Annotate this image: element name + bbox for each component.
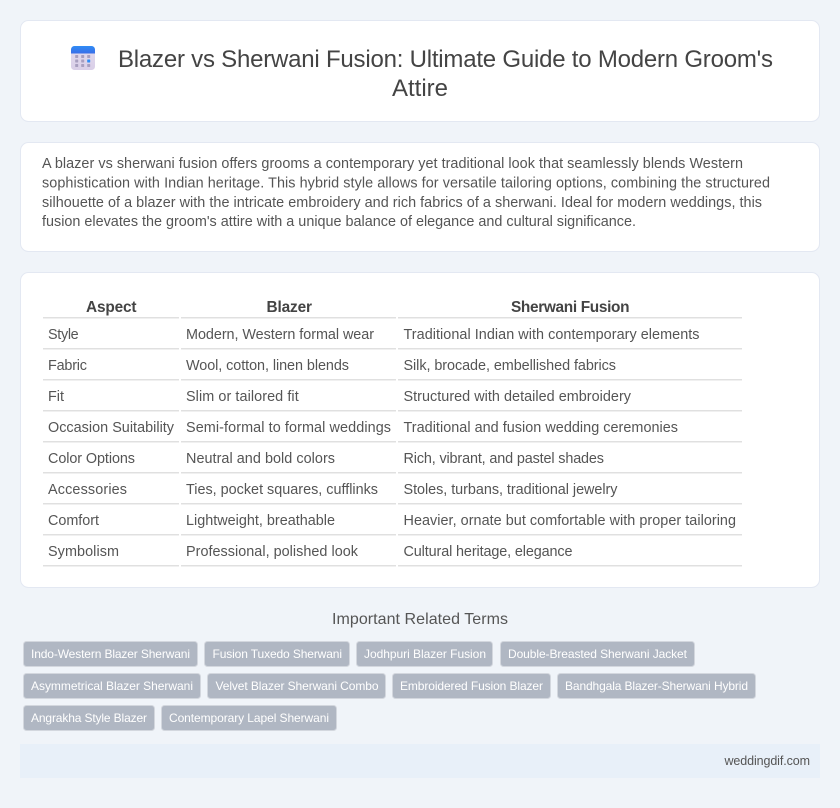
chip: Double-Breasted Sherwani Jacket xyxy=(508,647,688,661)
chip: Angrakha Style Blazer xyxy=(31,711,147,725)
row: color options xyxy=(48,451,604,467)
text block: introduction: fusion elevates the groom's attire with a unique balance of elegance and cultural significance. xyxy=(42,214,636,230)
chip xyxy=(24,642,198,666)
row: color options: Rich, vibrant, and pastel shades xyxy=(404,451,604,467)
chip: Contemporary Lapel Sherwani xyxy=(169,711,329,725)
panel: description xyxy=(20,142,820,252)
row: fabric: Wool, cotton, linen blends xyxy=(186,358,349,374)
row: style: Traditional Indian with contemporary elements xyxy=(404,327,700,343)
row: symbolism xyxy=(48,544,572,560)
heading: important related terms: Important Related Terms xyxy=(332,611,508,628)
text block: introduction xyxy=(42,156,770,230)
row: fabric: Silk, brocade, embellished fabrics xyxy=(404,358,616,374)
text block: introduction: sophistication with Indian heritage. This hybrid style allows for versatile tailoring options, combining the structured xyxy=(42,176,770,192)
row: symbolism: Professional, polished look xyxy=(186,544,359,560)
row: accessories xyxy=(48,482,618,498)
row: accessories: Stoles, turbans, traditional jewelry xyxy=(404,482,618,498)
row: occasion suitability: Traditional and fusion wedding ceremonies xyxy=(404,420,678,436)
chip xyxy=(558,674,756,698)
chip xyxy=(392,674,550,698)
row: color options: Color Options xyxy=(48,451,135,467)
table header: Aspect xyxy=(86,299,136,316)
row: comfort xyxy=(48,513,736,529)
row: fit xyxy=(48,389,632,405)
chip: Fusion Tuxedo Sherwani xyxy=(212,647,342,661)
row: symbolism: Symbolism xyxy=(48,544,119,560)
table header: Sherwani Fusion xyxy=(511,299,630,316)
row: comfort: Comfort xyxy=(48,513,99,529)
icon: calendar xyxy=(71,46,95,70)
title xyxy=(118,46,773,102)
row: occasion suitability: Occasion Suitability xyxy=(48,420,175,436)
panel: related term chips xyxy=(24,642,756,730)
chip: Bandhgala Blazer-Sherwani Hybrid xyxy=(565,679,748,693)
row: occasion suitability: Semi-formal to formal weddings xyxy=(186,420,391,436)
row: style: Modern, Western formal wear xyxy=(186,327,374,343)
chip: Indo-Western Blazer Sherwani xyxy=(31,647,190,661)
panel: comparison table xyxy=(20,272,820,588)
chip xyxy=(24,674,200,698)
chip xyxy=(208,674,386,698)
footer xyxy=(20,744,820,778)
chip: Embroidered Fusion Blazer xyxy=(400,679,543,693)
row: color options: Neutral and bold colors xyxy=(186,451,335,467)
row: comfort: Heavier, ornate but comfortable with proper tailoring xyxy=(404,513,736,529)
row: occasion suitability xyxy=(48,420,678,436)
chip xyxy=(24,706,154,730)
row: style xyxy=(48,327,700,343)
row: style: Style xyxy=(48,327,79,343)
chip: Asymmetrical Blazer Sherwani xyxy=(31,679,193,693)
row: fabric xyxy=(48,358,616,374)
row: fabric: Fabric xyxy=(48,358,87,374)
row: fit: Fit xyxy=(48,389,64,405)
chip xyxy=(204,642,350,666)
title: Attire xyxy=(392,75,448,102)
row: symbolism: Cultural heritage, elegance xyxy=(404,544,572,560)
panel: header xyxy=(20,20,820,122)
footer: weddingdif.com xyxy=(724,754,810,768)
table header: Blazer xyxy=(266,299,312,316)
chip: Velvet Blazer Sherwani Combo xyxy=(216,679,379,693)
row: fit: Slim or tailored fit xyxy=(186,389,299,405)
row: fit: Structured with detailed embroidery xyxy=(404,389,632,405)
chip xyxy=(162,706,336,730)
chip xyxy=(356,642,492,666)
row: comfort: Lightweight, breathable xyxy=(186,513,335,529)
text block: introduction: silhouette of a blazer with the intricate embroidery and rich fabrics of a sherwani. Ideal for modern weddings, this xyxy=(42,195,762,211)
chip: Jodhpuri Blazer Fusion xyxy=(364,647,486,661)
table header xyxy=(86,299,630,316)
chip xyxy=(500,642,694,666)
title: Blazer vs Sherwani Fusion: Ultimate Guide to Modern Groom's xyxy=(118,46,773,73)
row: accessories: Accessories xyxy=(48,482,127,498)
text block: introduction: A blazer vs sherwani fusion offers grooms a contemporary yet traditional look that seamlessly blends Western xyxy=(42,156,743,172)
row: accessories: Ties, pocket squares, cufflinks xyxy=(186,482,378,498)
